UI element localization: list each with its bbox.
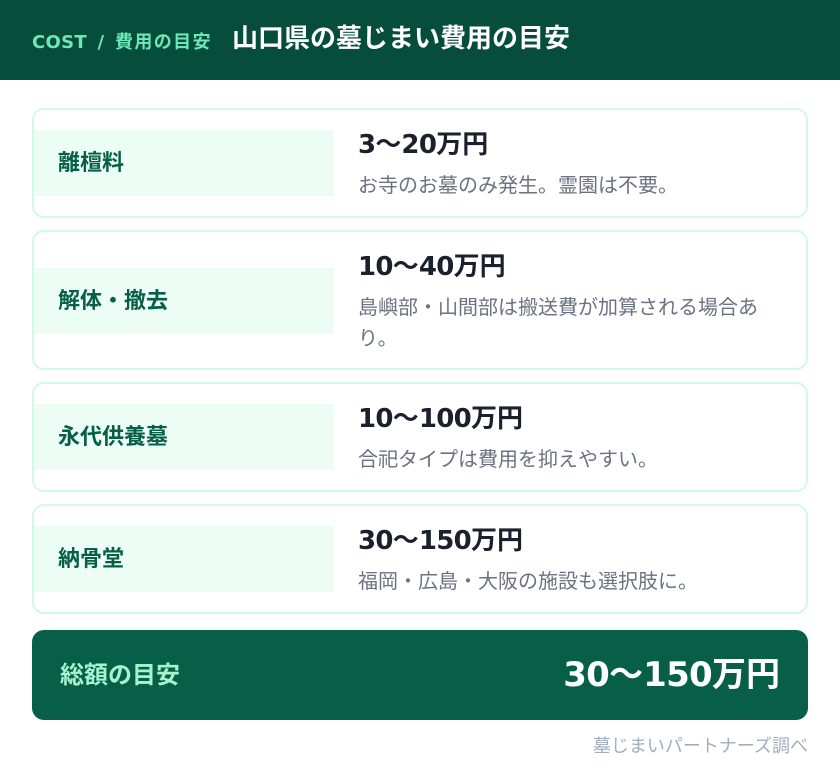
- value: 3〜20万円: 3〜20万円: [358, 124, 488, 161]
- panel: 離檀料: [32, 108, 808, 218]
- label: 永代供養墓: 永代供養墓: [58, 419, 168, 451]
- header band: [0, 0, 840, 80]
- header eyebrow: COST / 費用の目安: [32, 28, 212, 54]
- description: 永代供養墓: 合祀タイプは費用を抑えやすい。: [358, 443, 658, 472]
- label: 解体・撤去: [34, 268, 334, 334]
- panel: total: [32, 630, 808, 720]
- label: 解体・撤去: 解体・撤去: [58, 283, 168, 315]
- source note: 墓じまいパートナーズ調べ: [593, 732, 808, 758]
- panel: 永代供養墓: [32, 382, 808, 492]
- title: 山口県の墓じまい費用の目安: [232, 18, 570, 55]
- panel: 解体・撤去: [32, 230, 808, 370]
- total value: 30〜150万円: [563, 647, 780, 696]
- panel: 納骨堂: [32, 504, 808, 614]
- value: 30〜150万円: 30〜150万円: [358, 520, 523, 557]
- label: 永代供養墓: [34, 404, 334, 470]
- label: 離檀料: 離檀料: [58, 145, 124, 177]
- description: 解体・撤去: 島嶼部・山間部は搬送費が加算される場合あり。: [358, 291, 758, 351]
- label: 納骨堂: 納骨堂: [58, 541, 124, 573]
- label: 納骨堂: [34, 526, 334, 592]
- description: 離檀料: お寺のお墓のみ発生。霊園は不要。: [358, 169, 678, 198]
- total label: 総額の目安: [60, 655, 180, 690]
- value: 10〜100万円: 10〜100万円: [358, 398, 523, 435]
- label: 離檀料: [34, 130, 334, 196]
- description: 納骨堂: 福岡・広島・大阪の施設も選択肢に。: [358, 565, 698, 594]
- value: 10〜40万円: 10〜40万円: [358, 246, 506, 283]
